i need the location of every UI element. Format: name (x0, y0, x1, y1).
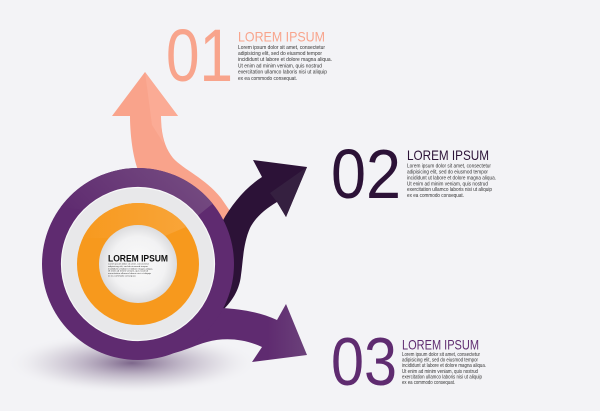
centre text: exercitation ullamco laboris nisi ut aliquip (108, 272, 152, 275)
number 03: 03 (331, 324, 397, 400)
centre text: incididunt ut labore et dolore magna aliqua. (108, 267, 153, 270)
grey inner disc (62, 188, 214, 340)
block 02 (331, 135, 496, 213)
body 01: incididunt ut labore et dolore magna aliqua. (238, 57, 332, 63)
centre text: Lorem ipsum dolor sit amet, consectetur (108, 262, 149, 266)
body 01: exercitation ullamco laboris nisi ut aliquip (238, 70, 327, 76)
body 01: Lorem ipsum dolor sit amet, consectetur (238, 45, 325, 51)
body 02: incididunt ut labore et dolore magna aliqua. (407, 176, 496, 182)
body 02: Ut enim ad minim veniam, quis nostrud (407, 181, 488, 187)
body 02 (407, 164, 496, 199)
orange ring (77, 203, 199, 325)
body 01: adipisicing elit, sed do eiusmod tempor (238, 51, 322, 57)
body 01: ex ea commodo consequat. (238, 76, 297, 82)
centre text: ex ea commodo consequat. (108, 274, 136, 277)
body 03: Ut enim ad minim veniam, quis nostrud (402, 369, 478, 375)
block 01 (166, 14, 332, 97)
body 03: ex ea commodo consequat. (402, 380, 455, 386)
body 02: exercitation ullamco laboris nisi ut aliquip (407, 187, 492, 193)
centre text: Ut enim ad minim veniam, quis nostrud (108, 270, 149, 273)
centre text: adipisicing elit, sed do eiusmod tempor (108, 265, 148, 268)
arrow 03: purple (150, 304, 307, 362)
centre white disc (99, 225, 177, 303)
body 02: adipisicing elit, sed do eiusmod tempor (407, 170, 488, 176)
centre text (108, 254, 168, 277)
body 01: Ut enim ad minim veniam, quis nostrud (238, 64, 322, 70)
body 03: exercitation ullamco laboris nisi ut aliquip (402, 374, 482, 380)
heading 02: LOREM IPSUM (407, 147, 489, 163)
centre text: LOREM IPSUM (108, 254, 168, 264)
body 02: Lorem ipsum dolor sit amet, consectetur (407, 164, 491, 170)
body 03 (402, 352, 486, 386)
body 03: Lorem ipsum dolor sit amet, consectetur (402, 352, 480, 358)
arrow 02: dark purple (200, 160, 307, 309)
body 03: adipisicing elit, sed do eiusmod tempor (402, 358, 478, 364)
body 03: incididunt ut labore et dolore magna aliqua. (402, 363, 486, 369)
heading 01: LOREM IPSUM (238, 28, 325, 44)
heading 03: LOREM IPSUM (402, 336, 479, 352)
circle shadow (6, 332, 258, 394)
body 02: ex ea commodo consequat. (407, 193, 464, 199)
number 02: 02 (331, 135, 401, 213)
main circle: purple ring (42, 168, 234, 360)
arrow 01: salmon (112, 72, 232, 228)
body 01 (238, 45, 332, 82)
block 03 (331, 324, 486, 400)
number 01: 01 (166, 14, 233, 97)
